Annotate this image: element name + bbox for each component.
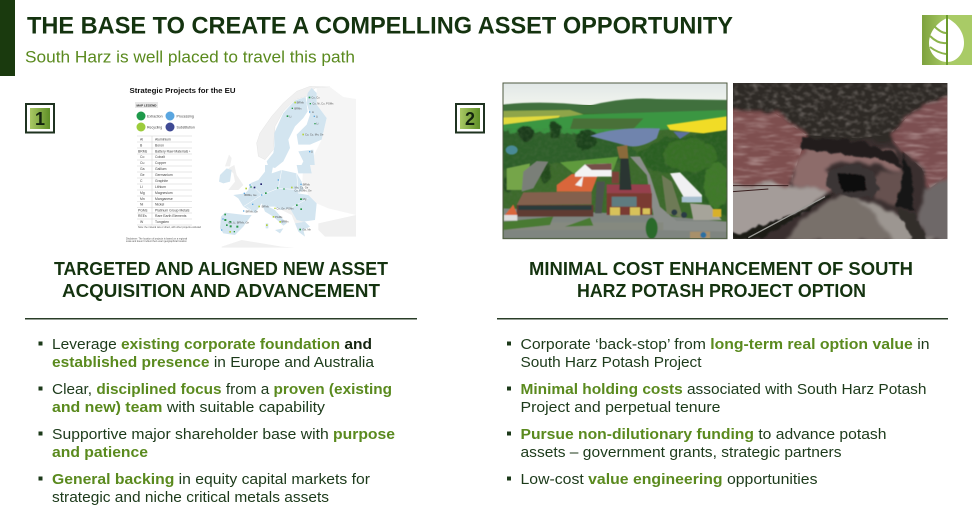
title: THE BASE TO CREATE A COMPELLING ASSET OPPORTUNITY bbox=[27, 12, 733, 40]
heading: left column: TARGETED AND ALIGNED NEW ASSET bbox=[54, 259, 388, 279]
bullet list: left column: established presence in Europe and Australia bbox=[52, 355, 375, 371]
bullet list: left column bbox=[38, 337, 395, 506]
bullet list: right column: assets – government grants, strategic partners bbox=[520, 445, 842, 461]
bullet list: right column bbox=[507, 337, 930, 488]
central and southern Europe: Cu, Li, BRMs, Ge bbox=[228, 220, 250, 224]
central and southern Europe: Ga, Mn bbox=[302, 227, 312, 231]
bullet list: right column: Pursue non-dilutionary funding to advance potash bbox=[520, 427, 886, 443]
central and southern Europe: PGMs bbox=[275, 215, 283, 219]
map material key table: PGMs bbox=[138, 208, 148, 212]
photo: aerial view of South Harz site bbox=[500, 80, 730, 242]
northern Europe: Li bbox=[312, 110, 314, 114]
number badge 1: 1 bbox=[35, 109, 45, 129]
bullet list: left column: and patience bbox=[52, 445, 148, 461]
map material key table: Manganese bbox=[155, 197, 173, 201]
northern Europe: Cu, Ni, Co, PGMs bbox=[312, 102, 334, 106]
map material key table: Disclaimer: The location of projects is based on a regional bbox=[126, 238, 188, 240]
northern Europe bbox=[225, 86, 356, 168]
map material key table: Aluminium bbox=[155, 138, 171, 142]
bullet list: left column: Leverage existing corporate foundation and bbox=[52, 337, 372, 353]
central and southern Europe: BRMs, Ge bbox=[246, 210, 258, 214]
map material key table: Mn bbox=[140, 197, 145, 201]
map material key table: REEs bbox=[138, 214, 147, 218]
bullet list: right column: Project and perpetual tenure bbox=[520, 400, 720, 416]
header accent bar bbox=[0, 0, 15, 76]
map material key table: Li bbox=[140, 185, 143, 189]
map material key table: W bbox=[140, 220, 144, 224]
map material key table: Mg bbox=[140, 191, 145, 195]
map: Strategic Projects for the EU bbox=[126, 86, 356, 248]
northern Europe: Li bbox=[316, 122, 319, 126]
central and southern Europe: BRMs bbox=[281, 220, 289, 224]
number badge 1 bbox=[26, 104, 54, 132]
number badge 2: 2 bbox=[465, 109, 475, 129]
bullet list: right column: Corporate ‘back-stop’ from long-term real option value in bbox=[520, 337, 930, 353]
heading: right column bbox=[529, 259, 913, 301]
central and southern Europe: Mg bbox=[303, 197, 307, 201]
heading: left column: ACQUISITION AND ADVANCEMENT bbox=[62, 281, 380, 301]
heading: right column: HARZ POTASH PROJECT OPTION bbox=[577, 281, 866, 301]
map material key table: Graphite bbox=[155, 179, 168, 183]
map legend: Recycling bbox=[147, 126, 162, 130]
central and southern Europe: Cu, Ge, PGMs bbox=[276, 206, 294, 210]
map legend bbox=[135, 102, 195, 132]
map legend: MAP LEGEND bbox=[136, 103, 157, 107]
bullet list: left column: General backing in equity capital markets for bbox=[52, 472, 370, 488]
bullet list: left column: Supportive major shareholder base with purpose bbox=[52, 427, 395, 443]
central and southern Europe: BRMs bbox=[303, 182, 311, 186]
map material key table: B bbox=[140, 144, 143, 148]
map material key table: Note: the mineral raw or direct, with other projects excluded bbox=[138, 226, 202, 229]
map material key table: BRMs bbox=[138, 150, 148, 154]
bullet list: left column: strategic and niche critical metals assets bbox=[52, 490, 329, 506]
map material key table: Lithium bbox=[155, 185, 166, 189]
map material key table: C bbox=[140, 179, 143, 183]
map material key table: scale and doesn't reflect their exact geographical location bbox=[126, 240, 187, 243]
bullet list: right column: South Harz Potash Project bbox=[520, 355, 702, 371]
map material key table: Al bbox=[140, 138, 143, 142]
subtitle: South Harz is well placed to travel this path bbox=[25, 48, 355, 66]
heading: right column: MINIMAL COST ENHANCEMENT OF SOUTH bbox=[529, 259, 913, 279]
photo: underground potash mine tunnel bbox=[733, 83, 948, 239]
central and southern Europe: BRMs, Ge bbox=[244, 193, 257, 197]
northern Europe: BRMs bbox=[294, 106, 302, 110]
map material key table: Nickel bbox=[155, 202, 164, 206]
map legend: Extraction bbox=[147, 114, 163, 118]
map material key table: Rare Earth Elements bbox=[155, 214, 187, 218]
northern Europe: BRMs bbox=[297, 101, 305, 105]
map material key table: Battery Raw Materials ¹ bbox=[155, 150, 191, 154]
map material key table: Co bbox=[140, 155, 144, 159]
map material key table: Ge bbox=[140, 173, 145, 177]
central and southern Europe: Cu, PGMs, Ge bbox=[294, 188, 312, 192]
map title: Strategic Projects for the EU bbox=[130, 86, 236, 95]
central and southern Europe: Mn, Cu, Ge bbox=[295, 185, 309, 189]
map material key table: Cobalt bbox=[155, 155, 165, 159]
northern Europe: Cu, Co bbox=[311, 96, 320, 100]
number badge 2 bbox=[456, 104, 484, 132]
map material key table: Magnesium bbox=[155, 191, 173, 195]
central and southern Europe: BRMs bbox=[262, 205, 270, 209]
central and southern Europe bbox=[219, 165, 356, 248]
northern Europe: Li bbox=[289, 114, 292, 118]
northern Europe: Li bbox=[316, 114, 318, 118]
map material key table: Gallium bbox=[155, 167, 167, 171]
bullet list: right column: Low-cost value engineering opportunities bbox=[520, 472, 818, 488]
map material key table: Ni bbox=[140, 202, 143, 206]
bullet list: right column: Minimal holding costs associated with South Harz Potash bbox=[520, 382, 927, 398]
map material key table: Ga bbox=[140, 167, 145, 171]
northern Europe: Li bbox=[311, 150, 313, 154]
map material key table: Copper bbox=[155, 161, 167, 165]
map legend: Processing bbox=[176, 114, 194, 118]
map material key table: Tungsten bbox=[155, 220, 169, 224]
map material key table: Cu bbox=[140, 161, 144, 165]
map legend: Substitution bbox=[176, 126, 195, 130]
map material key table: Germanium bbox=[155, 173, 173, 177]
bullet list: left column: and new) team with suitable capability bbox=[52, 400, 326, 416]
icon: company leaf logo bbox=[922, 15, 972, 65]
northern Europe: Cu, Co, Mn, Ge bbox=[305, 132, 324, 136]
map material key table: Platinum Group Metals bbox=[155, 208, 190, 212]
heading: left column bbox=[54, 259, 388, 301]
bullet list: left column: Clear, disciplined focus from a proven (existing bbox=[52, 382, 392, 398]
map material key table bbox=[126, 136, 202, 243]
map material key table: Boron bbox=[155, 144, 164, 148]
